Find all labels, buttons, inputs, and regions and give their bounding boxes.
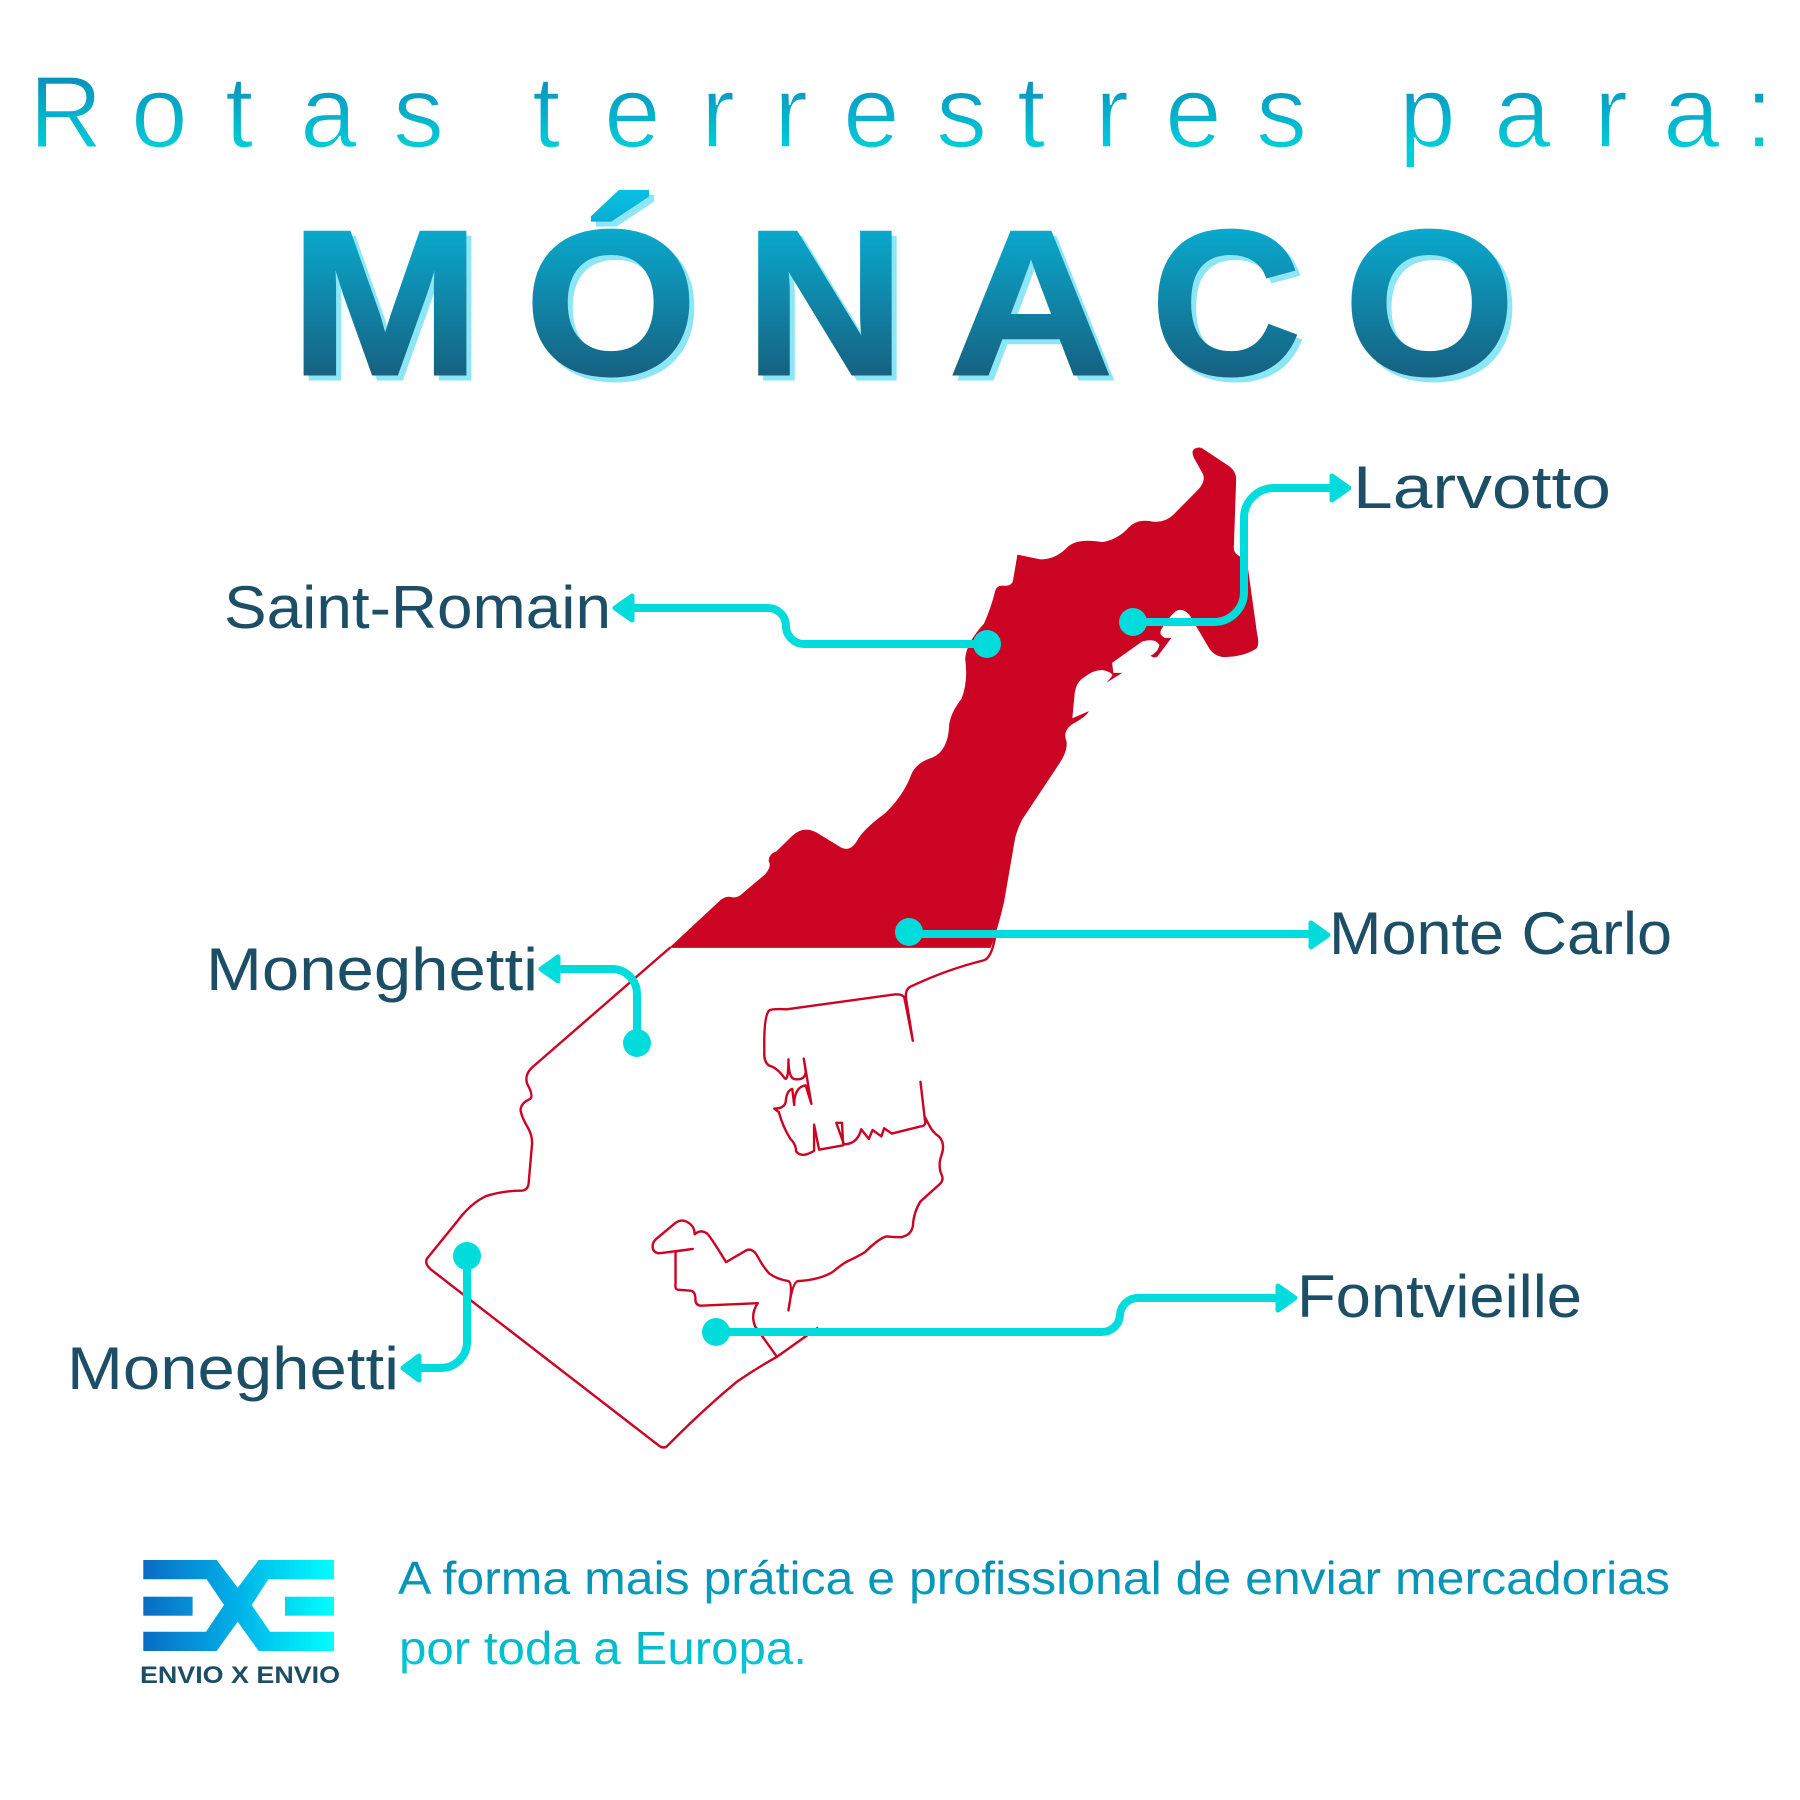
label: Moneghetti north: Moneghetti <box>206 936 538 1003</box>
tagline: por toda a Europa. <box>399 1622 807 1674</box>
heading: MÓNACO <box>290 188 1515 418</box>
logo icon <box>143 1560 334 1651</box>
heading: MÓNACO: N <box>745 188 905 418</box>
heading: MÓNACO: O <box>1344 188 1515 418</box>
connector: Moneghetti south <box>403 1242 481 1380</box>
connector: Fontvieille <box>702 1286 1295 1346</box>
label: Monte Carlo: Monte Carlo <box>1329 900 1672 967</box>
tagline <box>398 1552 1670 1674</box>
label: Larvotto: Larvotto <box>1353 454 1611 521</box>
title: Rotas terrestres para: Rotas terrestres para: <box>29 55 1773 169</box>
logo wordmark: ENVIO X ENVIO <box>140 1662 340 1689</box>
label: Saint-Romain: Saint-Romain <box>224 574 611 641</box>
heading: MÓNACO: A <box>949 188 1113 418</box>
label: Fontvieille: Fontvieille <box>1297 1263 1582 1330</box>
connector: Monte Carlo <box>895 918 1328 947</box>
heading: MÓNACO: Ó <box>525 188 697 418</box>
label: Moneghetti south: Moneghetti <box>67 1335 399 1402</box>
heading: MÓNACO: C <box>1151 188 1301 418</box>
connector: Moneghetti north <box>541 957 651 1057</box>
map: red upper half <box>669 447 1258 948</box>
heading: MÓNACO: M <box>290 188 480 418</box>
logo: Envio X Envio <box>140 1560 340 1689</box>
connector: Saint-Romain <box>615 596 1001 658</box>
map: lower outline <box>426 937 995 1447</box>
map: Monaco <box>426 447 1258 1447</box>
tagline: A forma mais prática e profissional de enviar mercadorias <box>398 1552 1670 1604</box>
connector: Larvotto <box>1119 476 1349 636</box>
